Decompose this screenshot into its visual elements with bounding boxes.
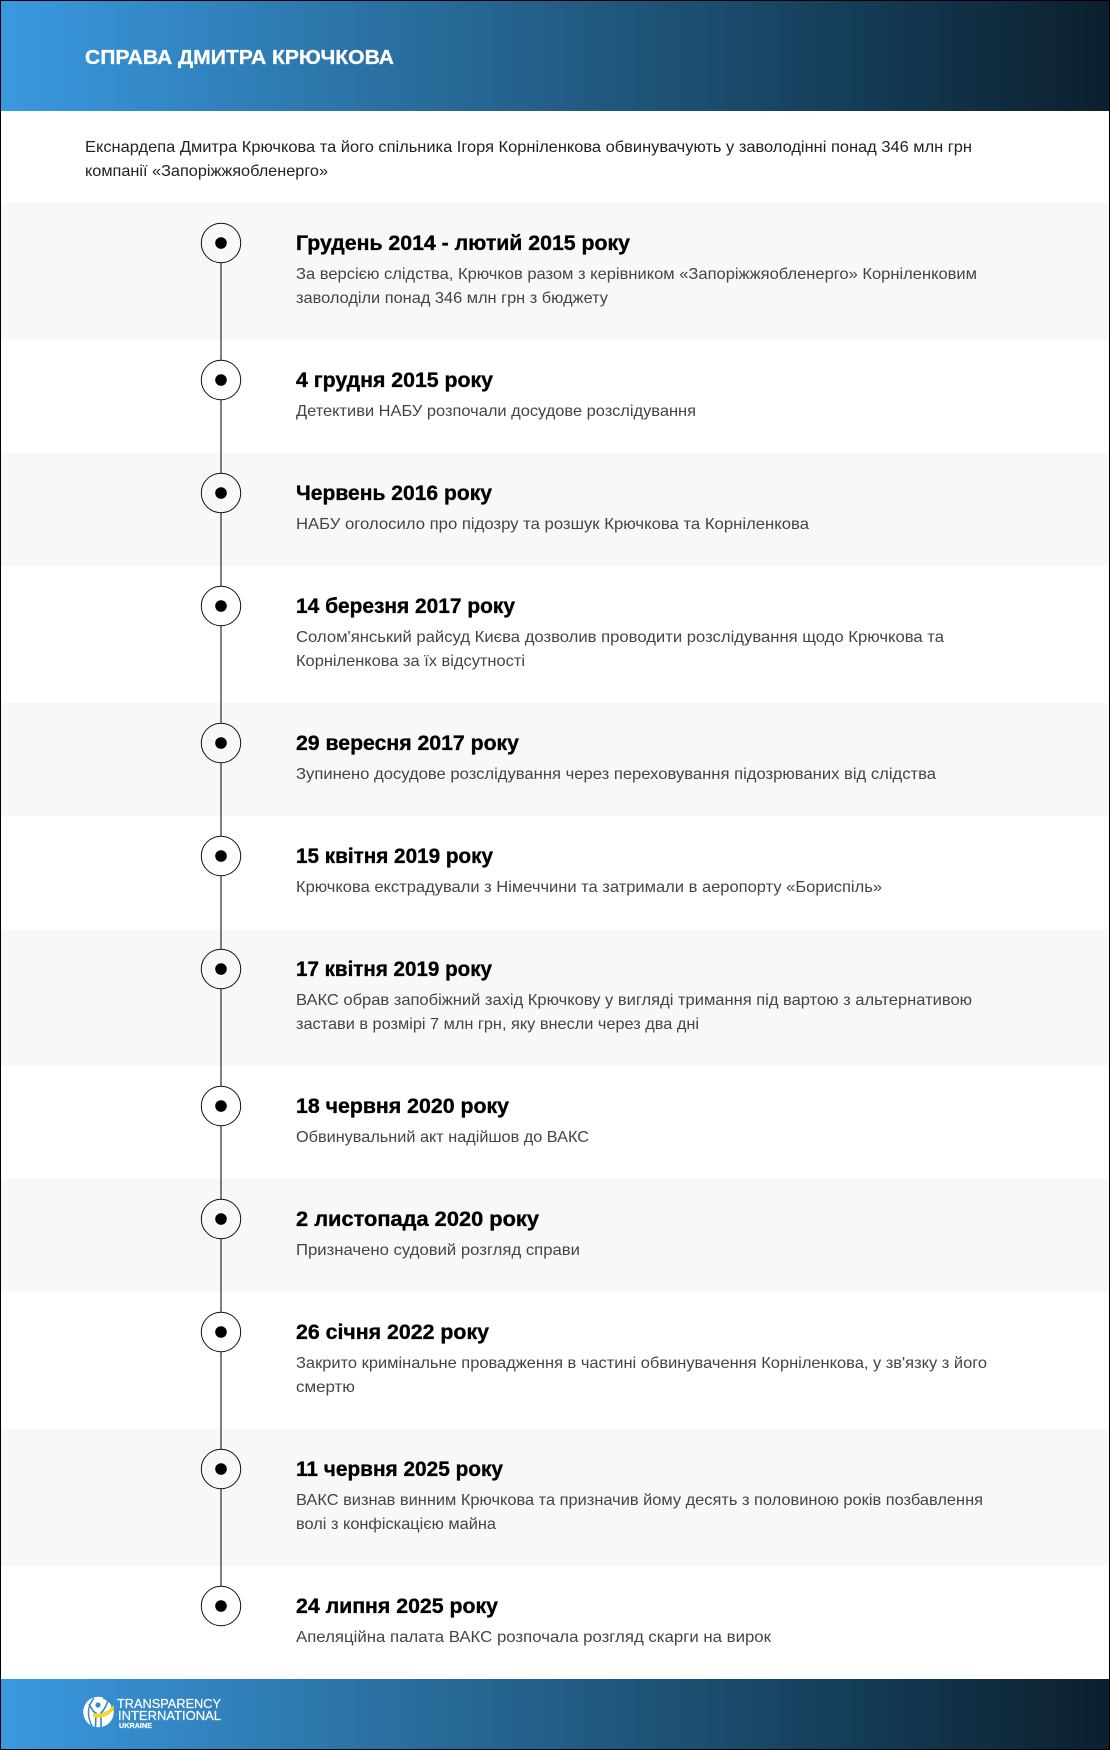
logo wordmark: INTERNATIONAL [118, 1708, 221, 1723]
event: December 2014: Грудень 2014 - лютий 2015 року [296, 232, 630, 255]
event: 2 November 2020: 2 листопада 2020 року [296, 1208, 539, 1231]
event: 11 June 2025 [201, 1449, 983, 1533]
event: 24 July 2025 [201, 1586, 772, 1646]
timeline vertical line [220, 243, 222, 1606]
event: 14 March 2017: Корніленкова за їх відсутності [296, 653, 525, 670]
event: 2 November 2020: Призначено судовий розгляд справи [296, 1242, 580, 1259]
event: 24 July 2025: Апеляційна палата ВАКС розпочала розгляд скарги на вирок [296, 1629, 772, 1646]
row background bands [0, 203, 1110, 1566]
event: 24 July 2025: 24 липня 2025 року [296, 1595, 498, 1618]
event: 4 December 2015: Детективи НАБУ розпочали досудове розслідування [296, 403, 696, 420]
event: 4 December 2015 [201, 360, 696, 420]
logo wordmark [117, 1696, 221, 1730]
event: 17 April 2019: застави в розмірі 7 млн грн, яку внесли через два дні [296, 1016, 699, 1033]
event: June 2016: НАБУ оголосило про підозру та розшук Крючкова та Корніленкова [296, 516, 809, 533]
event: December 2014: За версією слідства, Крючков разом з керівником «Запоріжжяобленерго» Корніленковим [296, 266, 977, 283]
intro text: Екснардепа Дмитра Крючкова та його спільника Ігоря Корніленкова обвинувачують у заволодінні понад 346 млн грн [85, 139, 972, 156]
header banner [0, 0, 1110, 111]
event: 29 September 2017 [201, 723, 936, 783]
event: 11 June 2025: ВАКС визнав винним Крючкова та призначив йому десять з половиною років позбавлення [296, 1492, 983, 1509]
event: December 2014 [201, 223, 977, 307]
event: 2 November 2020 [201, 1199, 580, 1259]
event: 11 June 2025: 11 червня 2025 року [296, 1458, 503, 1481]
icon: Transparency International globe logo [83, 1697, 114, 1727]
event: 29 September 2017: Зупинено досудове розслідування через переховування підозрюваних від слідства [296, 766, 936, 783]
event: 17 April 2019: 17 квітня 2019 року [296, 958, 492, 981]
event: June 2016 [201, 473, 809, 533]
event: 11 June 2025: волі з конфіскацією майна [296, 1516, 496, 1533]
event: 15 April 2019: Крючкова екстрадували з Німеччини та затримали в аеропорту «Бориспіль» [296, 879, 882, 896]
event: 18 June 2020: Обвинувальний акт надійшов до ВАКС [296, 1129, 589, 1146]
event: June 2016: Червень 2016 року [296, 482, 492, 505]
event: 14 March 2017 [201, 586, 944, 670]
intro text [85, 139, 972, 180]
event: 15 April 2019: 15 квітня 2019 року [296, 845, 493, 868]
event: 26 January 2022: смертю [296, 1379, 355, 1396]
event: 18 June 2020 [201, 1086, 589, 1146]
footer banner [0, 1679, 1110, 1750]
event: December 2014: заволоділи понад 346 млн грн з бюджету [296, 290, 608, 307]
event: 14 March 2017: 14 березня 2017 року [296, 595, 515, 618]
logo wordmark: TRANSPARENCY [117, 1696, 221, 1711]
event: 15 April 2019 [201, 836, 882, 896]
event: 26 January 2022: Закрито кримінальне провадження в частині обвинувачення Корніленкова, у зв'язку з його [296, 1355, 987, 1372]
event: 17 April 2019 [201, 949, 972, 1033]
event: 18 June 2020: 18 червня 2020 року [296, 1095, 509, 1118]
title: СПРАВА ДМИТРА КРЮЧКОВА [85, 47, 394, 69]
event: 4 December 2015: 4 грудня 2015 року [296, 369, 493, 392]
event: 29 September 2017: 29 вересня 2017 року [296, 732, 519, 755]
event: 17 April 2019: ВАКС обрав запобіжний захід Крючкову у вигляді тримання під вартою з альтернативою [296, 992, 972, 1009]
intro text: компанії «Запоріжжяобленерго» [85, 163, 328, 180]
event: 26 January 2022: 26 січня 2022 року [296, 1321, 489, 1344]
event: 26 January 2022 [201, 1312, 987, 1396]
logo wordmark: UKRAINE [119, 1723, 152, 1730]
event: 14 March 2017: Солом'янський райсуд Києва дозволив проводити розслідування щодо Крючкова та [296, 629, 944, 646]
